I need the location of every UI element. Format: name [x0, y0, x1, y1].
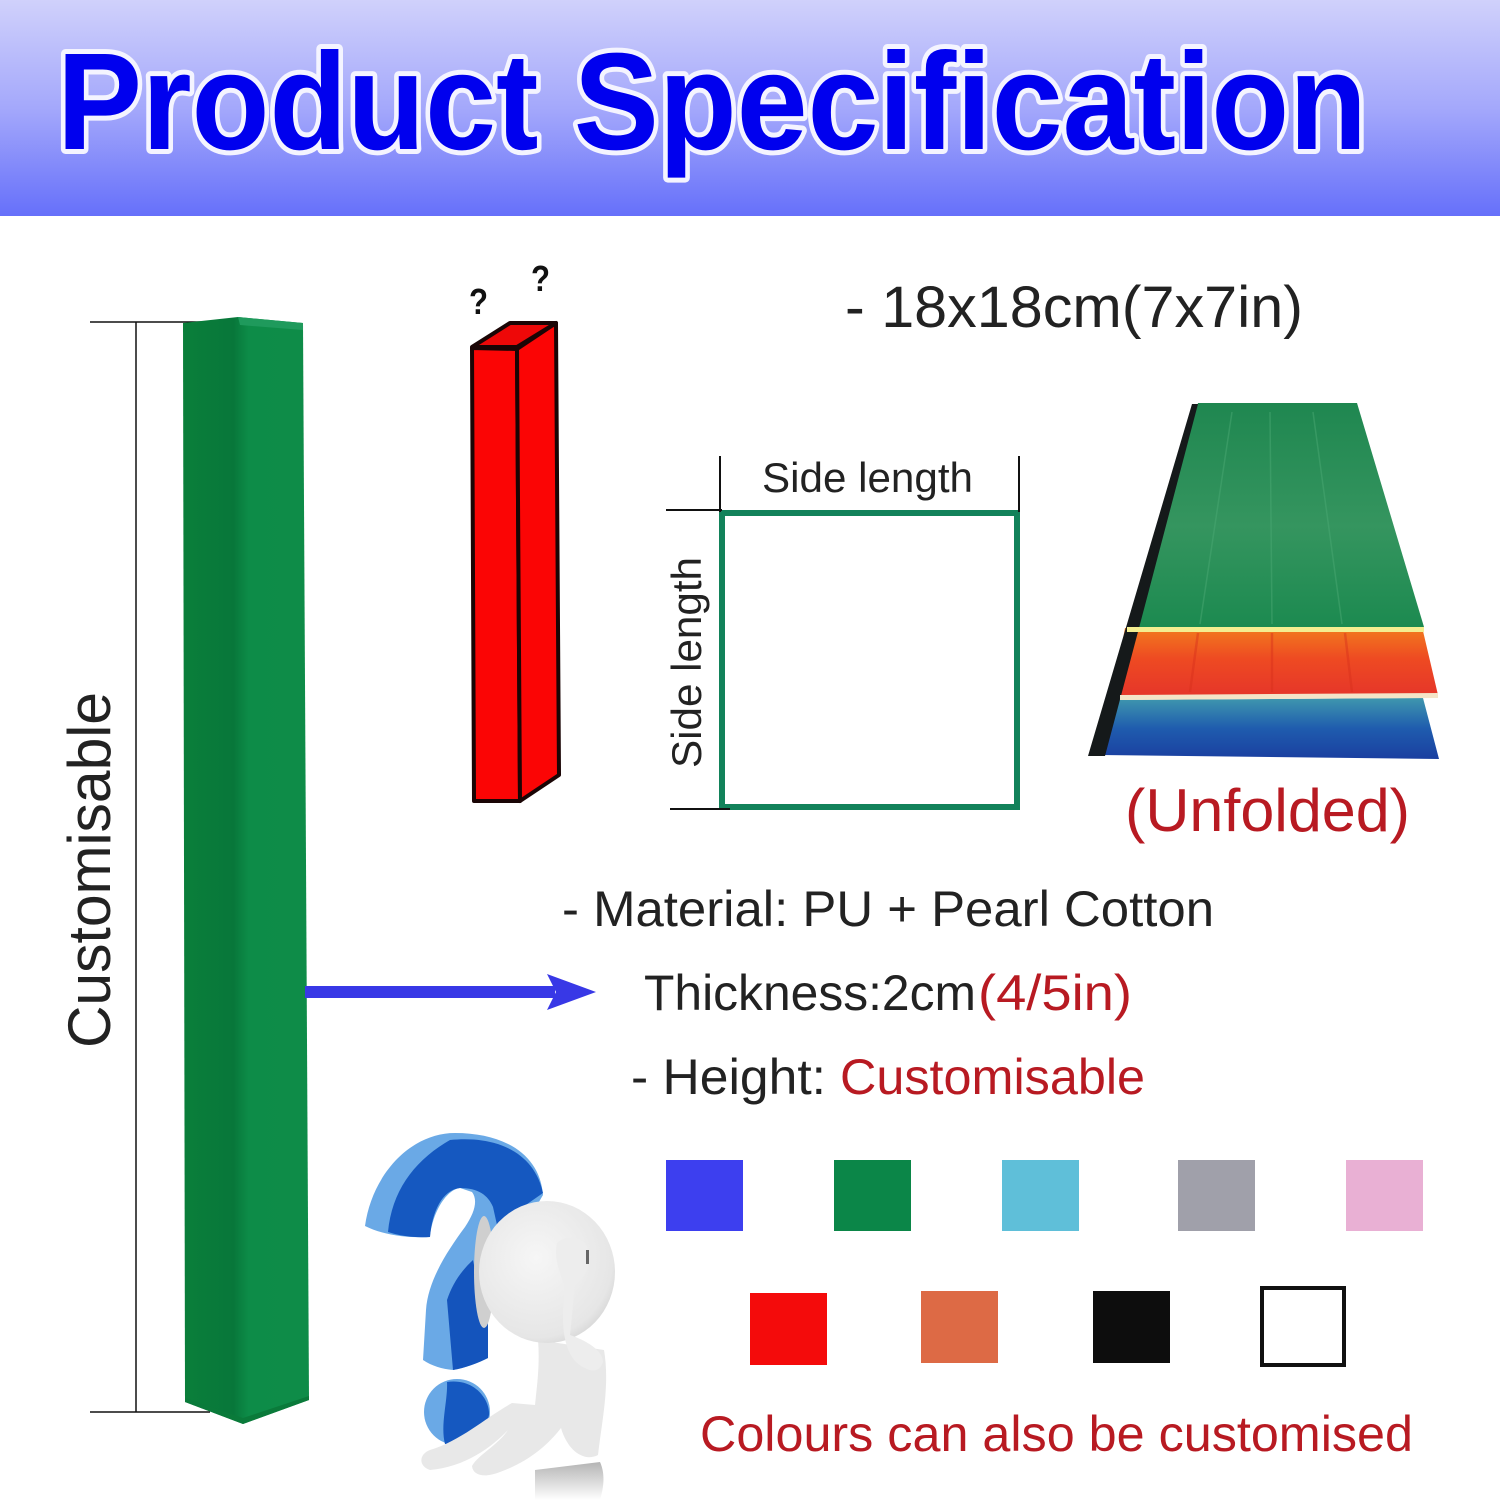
green pillar [183, 317, 309, 1424]
header banner [0, 0, 1500, 216]
black edge strip [1088, 404, 1198, 756]
unfolded cover [1088, 403, 1439, 844]
side length diagram: Side length [663, 557, 710, 768]
height text: Customisable [840, 1049, 1145, 1105]
thickness text: (4/5in) [978, 965, 1132, 1021]
green section [1136, 403, 1424, 627]
arm and hand [556, 1238, 603, 1370]
red section [1112, 628, 1438, 697]
reflection [535, 1462, 603, 1500]
head [474, 1216, 494, 1328]
legs and body [421, 1340, 606, 1475]
height text [631, 1049, 1145, 1105]
title: Product Specification [57, 25, 1367, 179]
height text: - Height: [631, 1049, 826, 1105]
thinking figure with question mark [365, 1133, 615, 1500]
arrow [305, 974, 596, 1010]
thickness text [644, 965, 1132, 1021]
red post with question marks: ? [531, 258, 550, 299]
side length diagram: Side length [762, 454, 973, 501]
red post with question marks [469, 258, 559, 801]
red post with question marks: ? [469, 281, 488, 322]
colours note: Colours can also be customised [700, 1406, 1413, 1462]
size text: - 18x18cm(7x7in) [845, 275, 1303, 340]
unfolded label: (Unfolded) [1125, 777, 1410, 844]
blue section [1100, 698, 1439, 759]
colour swatches [666, 1160, 1423, 1365]
height dimension: customisable: Customisable [56, 692, 123, 1048]
thickness text: Thickness:2cm [644, 965, 976, 1021]
material text: - Material: PU + Pearl Cotton [562, 881, 1214, 937]
side length diagram [663, 454, 1019, 809]
question mark [365, 1133, 543, 1445]
